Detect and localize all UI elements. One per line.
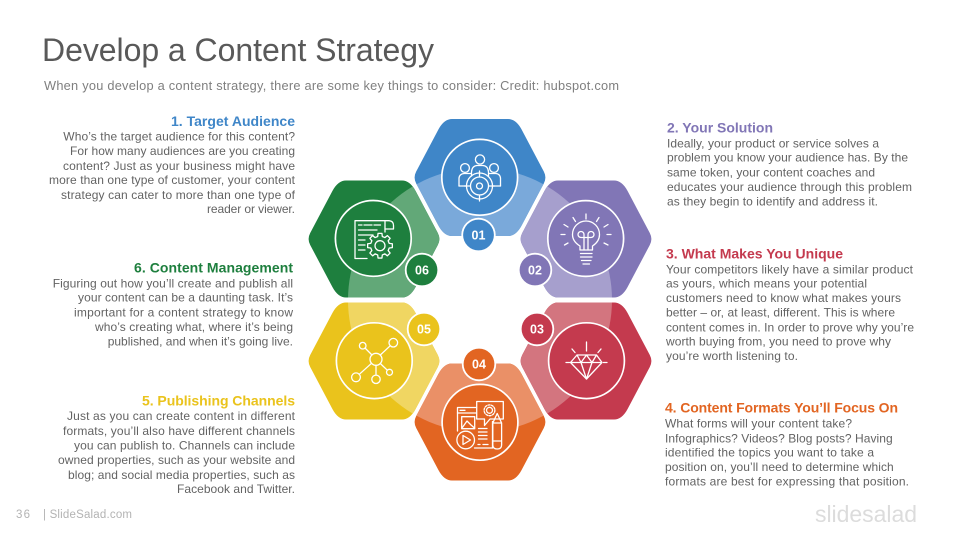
text block: 1. Target Audience: Who’s the target audience for this content? [63, 130, 295, 144]
text block: 1. Target Audience: reader or viewer. [207, 202, 295, 216]
text block: 4. Content Formats You'll Focus On: 4. Content Formats You’ll Focus On [665, 400, 898, 416]
text block: 2. Your Solution: same token, your content coaches and [667, 166, 875, 180]
badge 02: 02 [528, 264, 542, 278]
text block: 3. What Makes You Unique: as yours, which means your potential [666, 277, 867, 291]
text block: 4. Content Formats You'll Focus On: Infographics? Videos? Blog posts? Having [665, 431, 893, 445]
text block: 6. Content Management: 6. Content Management [134, 260, 293, 276]
text block: 5. Publishing Channels: Facebook and Twitter. [177, 482, 295, 496]
text block: 5. Publishing Channels: you can publish to. Channels can include [74, 438, 295, 452]
hexagon 05: publishing channels [309, 302, 441, 420]
hexagon 03: what makes you unique [520, 302, 651, 420]
icon: diamond [566, 342, 607, 379]
title: Develop a Content Strategy [42, 32, 434, 68]
text block: 4. Content Formats You'll Focus On: identified the topics you want to take a [665, 446, 874, 460]
text block: 3. What Makes You Unique: Your competitors likely have a similar product [666, 262, 914, 276]
text block: 5. Publishing Channels: owned properties, such as your website and [58, 453, 295, 467]
text block: 3. What Makes You Unique: you’re worth listening to. [666, 349, 798, 363]
text block: 4. Content Formats You'll Focus On: position on, you’ll need to determine which [665, 460, 894, 474]
badge 01: 01 [472, 228, 485, 242]
hexagon 02: your solution [518, 180, 651, 298]
icon: light bulb [561, 214, 611, 264]
text block: 3. What Makes You Unique [665, 245, 914, 363]
subtitle: When you develop a content strategy, there are some key things to consider: Credit: hubspot.com [44, 78, 619, 93]
footer: page number and site: | SlideSalad.com [43, 509, 132, 521]
text block: 5. Publishing Channels: formats, you’ll also have different channels [63, 424, 295, 438]
text block: 1. Target Audience: more than one type of customer, your content [49, 173, 296, 187]
text block: 3. What Makes You Unique: customers need to know what makes yours [666, 291, 901, 305]
text block: 5. Publishing Channels: Just as you can create content in different [67, 409, 296, 423]
text block: 6. Content Management: Figuring out how you’ll create and publish all [53, 276, 293, 290]
text block: 3. What Makes You Unique: 3. What Makes You Unique [666, 245, 843, 261]
text block: 2. Your Solution: Ideally, your product or service solves a [667, 137, 879, 151]
text block: 6. Content Management: who’s creating what, where it’s being [94, 320, 293, 334]
text block: 4. Content Formats You'll Focus On: formats are best for expressing that position. [665, 475, 909, 489]
text block: 3. What Makes You Unique: worth buying from, you need to prove why [665, 335, 891, 349]
icon: network nodes [352, 338, 398, 383]
icon: audience target [459, 155, 500, 201]
text block: 5. Publishing Channels [58, 393, 296, 496]
text block: 1. Target Audience: strategy can cater to more than one type of [61, 188, 296, 202]
text block: 2. Your Solution: educates your audience through this problem [667, 180, 912, 194]
text block: 4. Content Formats You'll Focus On [665, 400, 909, 489]
hexagon 01: target audience [415, 119, 545, 252]
text block: 1. Target Audience: 1. Target Audience [171, 113, 295, 129]
badge 04: 04 [472, 358, 486, 372]
badge 05: 05 [417, 322, 431, 336]
text block: 1. Target Audience: For how many audiences are you creating [70, 144, 295, 158]
text block: 6. Content Management: important for a content strategy to know [74, 306, 293, 320]
text block: 1. Target Audience: content? Just as your business might have [63, 159, 295, 173]
icon: document with gear [355, 221, 394, 258]
text block: 2. Your Solution: problem you know your audience has. By the [667, 151, 908, 165]
badge 03: 03 [530, 322, 544, 336]
text block: 5. Publishing Channels: 5. Publishing Channels [142, 393, 295, 409]
hexagon 04: content formats [415, 347, 545, 480]
text block: 4. Content Formats You'll Focus On: What forms will your content take? [665, 417, 852, 431]
text block: 5. Publishing Channels: blog; and social media properties, such as [68, 468, 295, 482]
logo: slidesalad: slidesalad [815, 501, 917, 527]
text block: 2. Your Solution [667, 120, 912, 209]
text block: 2. Your Solution: 2. Your Solution [667, 120, 773, 136]
text block: 6. Content Management [53, 260, 293, 349]
badge 06: 06 [415, 264, 429, 278]
text block: 3. What Makes You Unique: better – or, at least, different. This is where [666, 306, 895, 320]
icon: content formats [457, 402, 503, 449]
text block: 3. What Makes You Unique: content comes in. In order to prove why you’re [666, 321, 914, 335]
hexagon 06: content management [309, 180, 439, 298]
footer: page number and site: 36 [16, 509, 30, 521]
text block: 1. Target Audience [49, 113, 296, 216]
text block: 6. Content Management: published, and when it’s going live. [108, 335, 293, 349]
text block: 6. Content Management: your content can be a daunting task. It’s [78, 291, 293, 305]
text block: 2. Your Solution: as they begin to identify and address it. [667, 195, 878, 209]
